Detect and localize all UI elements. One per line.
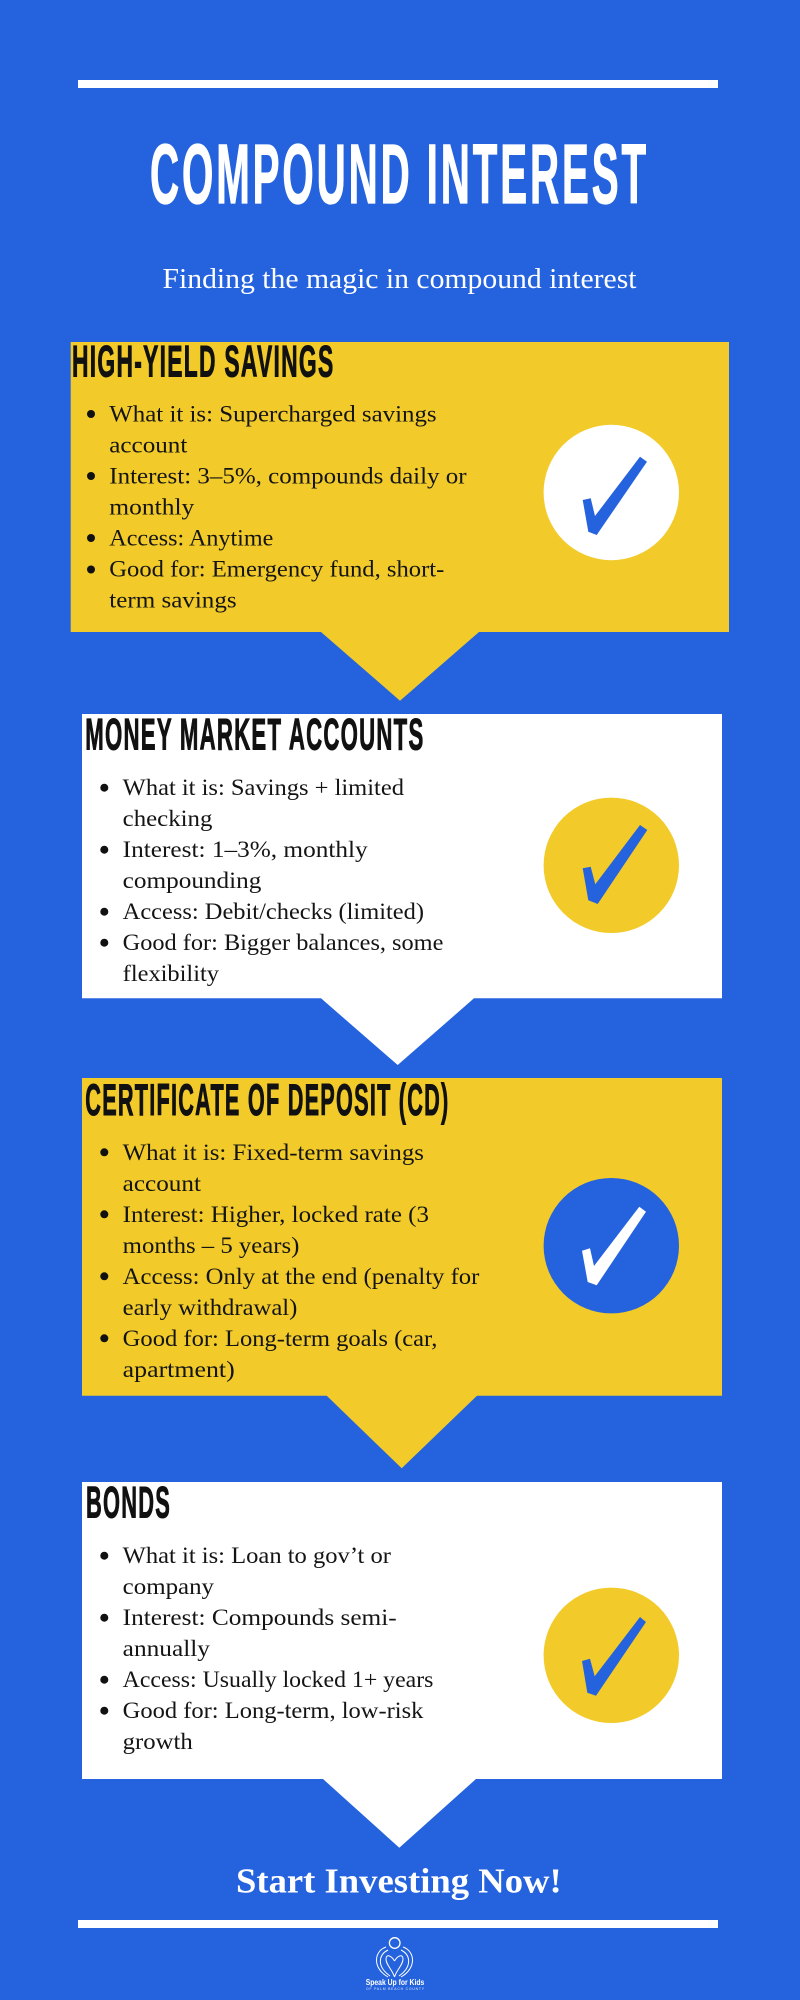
list: certificate of deposit details: Interest: Higher, locked rate (3 [123,1202,429,1228]
list: bonds details [100,1543,433,1755]
heading: high-yield savings: HIGH-YIELD SAVINGS [72,338,334,387]
logo: Speak Up for Kids [366,1938,425,1991]
panel background with pointer [71,342,729,701]
list: high-yield savings details: Good for: Emergency fund, short- [109,557,444,583]
list: money market details: What it is: Savings + limited [123,775,404,801]
logo name: Speak Up for Kids [366,1978,425,1987]
list: high-yield savings details: account [109,433,188,459]
icon: check mark on yellow circle [544,798,679,933]
list: bonds details: growth [123,1729,193,1755]
list: money market details: compounding [123,868,262,894]
list: high-yield savings details: monthly [109,495,195,521]
logo tagline: OF PALM BEACH COUNTY [366,1987,425,1991]
call to action: Start Investing Now! [236,1862,562,1901]
list: certificate of deposit details: months – 5 years) [123,1233,299,1259]
list: money market details: flexibility [123,961,219,987]
list: bonds details: company [123,1574,214,1600]
list: certificate of deposit details: early withdrawal) [123,1295,297,1321]
list: certificate of deposit details: Access: Only at the end (penalty for [123,1264,480,1290]
list: money market details: Good for: Bigger balances, some [123,930,443,956]
list: money market details [100,775,443,987]
panel: certificate of deposit [82,1076,722,1468]
list: bonds details: annually [123,1636,210,1662]
list: money market details: checking [123,806,213,832]
icon: check mark on yellow circle [544,1588,679,1723]
panel background with pointer [82,714,722,1065]
panel: bonds: BONDS [86,1478,171,1527]
panel: high-yield savings [71,338,729,701]
panel: money market accounts [82,710,722,1065]
panel background with pointer [82,1078,722,1468]
icon: check mark on blue circle [544,1178,679,1313]
list: high-yield savings details: Interest: 3–5%, compounds daily or [109,464,467,490]
logo mark [376,1938,412,1977]
list: certificate of deposit details: account [123,1171,201,1197]
list: bonds details: Good for: Long-term, low-risk [123,1698,424,1724]
panel: bonds [82,1478,722,1848]
subtitle: Finding the magic in compound interest [162,264,637,295]
list: bonds details: What it is: Loan to gov’t or [123,1543,391,1569]
list: high-yield savings details [87,402,467,614]
list: bonds details: Interest: Compounds semi- [123,1605,397,1631]
list: certificate of deposit details: Good for: Long-term goals (car, [123,1326,437,1352]
panel background with pointer [82,1482,722,1848]
list: high-yield savings details: term savings [109,588,237,614]
list: certificate of deposit details: apartment) [123,1357,235,1383]
list: high-yield savings details: Access: Anytime [109,526,273,552]
list: certificate of deposit details [100,1140,480,1383]
list: high-yield savings details: What it is: Supercharged savings [109,402,437,428]
list: money market details: Interest: 1–3%, monthly [123,837,368,863]
panel: money market accounts: MONEY MARKET ACCOUNTS [85,710,425,759]
list: certificate of deposit details: What it is: Fixed-term savings [123,1140,424,1166]
list: bonds details: Access: Usually locked 1+ years [123,1667,433,1693]
list: money market details: Access: Debit/checks (limited) [123,899,424,925]
icon: check mark on white circle [544,425,679,560]
